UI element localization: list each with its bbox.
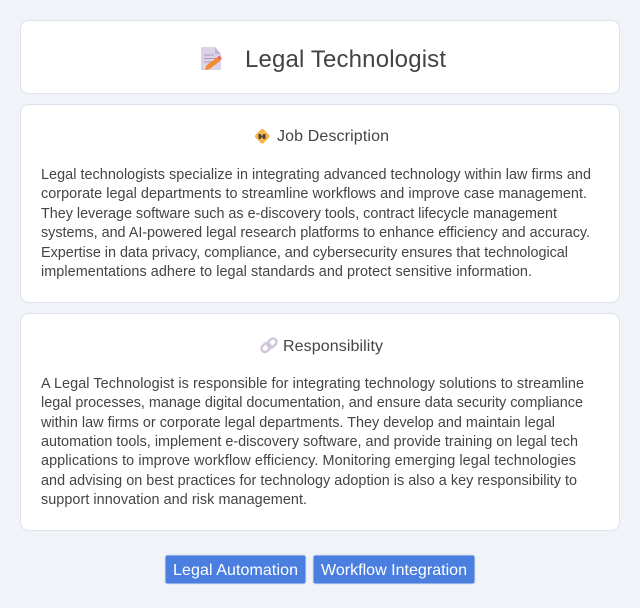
- heading: responsibility: Responsibility: [283, 338, 383, 355]
- text block: job description: implementations adhere to legal standards and protect sensitive information.: [41, 264, 532, 280]
- text block: job description: [41, 167, 591, 280]
- text block: responsibility: support innovation and risk management.: [41, 492, 307, 508]
- tag: workflow integration: [313, 555, 475, 584]
- icon: chain link: [260, 337, 278, 354]
- text block: responsibility: legal processes, manage digital documentation, and ensure data security compliance: [41, 395, 583, 411]
- title: Legal Technologist: [245, 46, 446, 73]
- text block: responsibility: and advising on best practices for technology adoption is also a key responsibility to: [41, 473, 577, 489]
- text block: responsibility: [40, 376, 584, 508]
- icon: document with pencil: [201, 47, 222, 70]
- tag: workflow integration: Workflow Integration: [321, 562, 467, 579]
- text block: job description: Legal technologists specialize in integrating advanced technology within law firms and: [41, 167, 591, 183]
- tag: legal automation: [165, 555, 306, 584]
- text block: responsibility: A Legal Technologist is responsible for integrating technology solutions to streamline: [41, 376, 584, 392]
- text block: responsibility: within law firms or corporate legal departments. They develop and maintain legal: [40, 415, 555, 431]
- text block: job description: corporate legal departments to streamline workflows and improve case management.: [41, 186, 587, 202]
- text block: job description: Expertise in data privacy, compliance, and cybersecurity ensures that technological: [41, 245, 568, 261]
- panel: responsibility: [20, 314, 620, 530]
- panel: job description: [20, 104, 620, 302]
- text block: job description: They leverage software such as e-discovery tools, contract lifecycle management: [41, 206, 557, 222]
- text block: job description: systems, and AI-powered legal research platforms to enhance efficiency and accuracy.: [41, 225, 590, 241]
- tag: legal automation: Legal Automation: [173, 562, 298, 579]
- icon: diamond sign: [254, 128, 270, 144]
- heading: job description: Job Description: [277, 128, 389, 145]
- panel: header: [20, 20, 620, 94]
- text block: responsibility: applications to improve workflow efficiency. Monitoring emerging legal technologies: [41, 453, 576, 469]
- text block: responsibility: automation tools, implement e-discovery software, and provide training on legal tech: [41, 434, 578, 450]
